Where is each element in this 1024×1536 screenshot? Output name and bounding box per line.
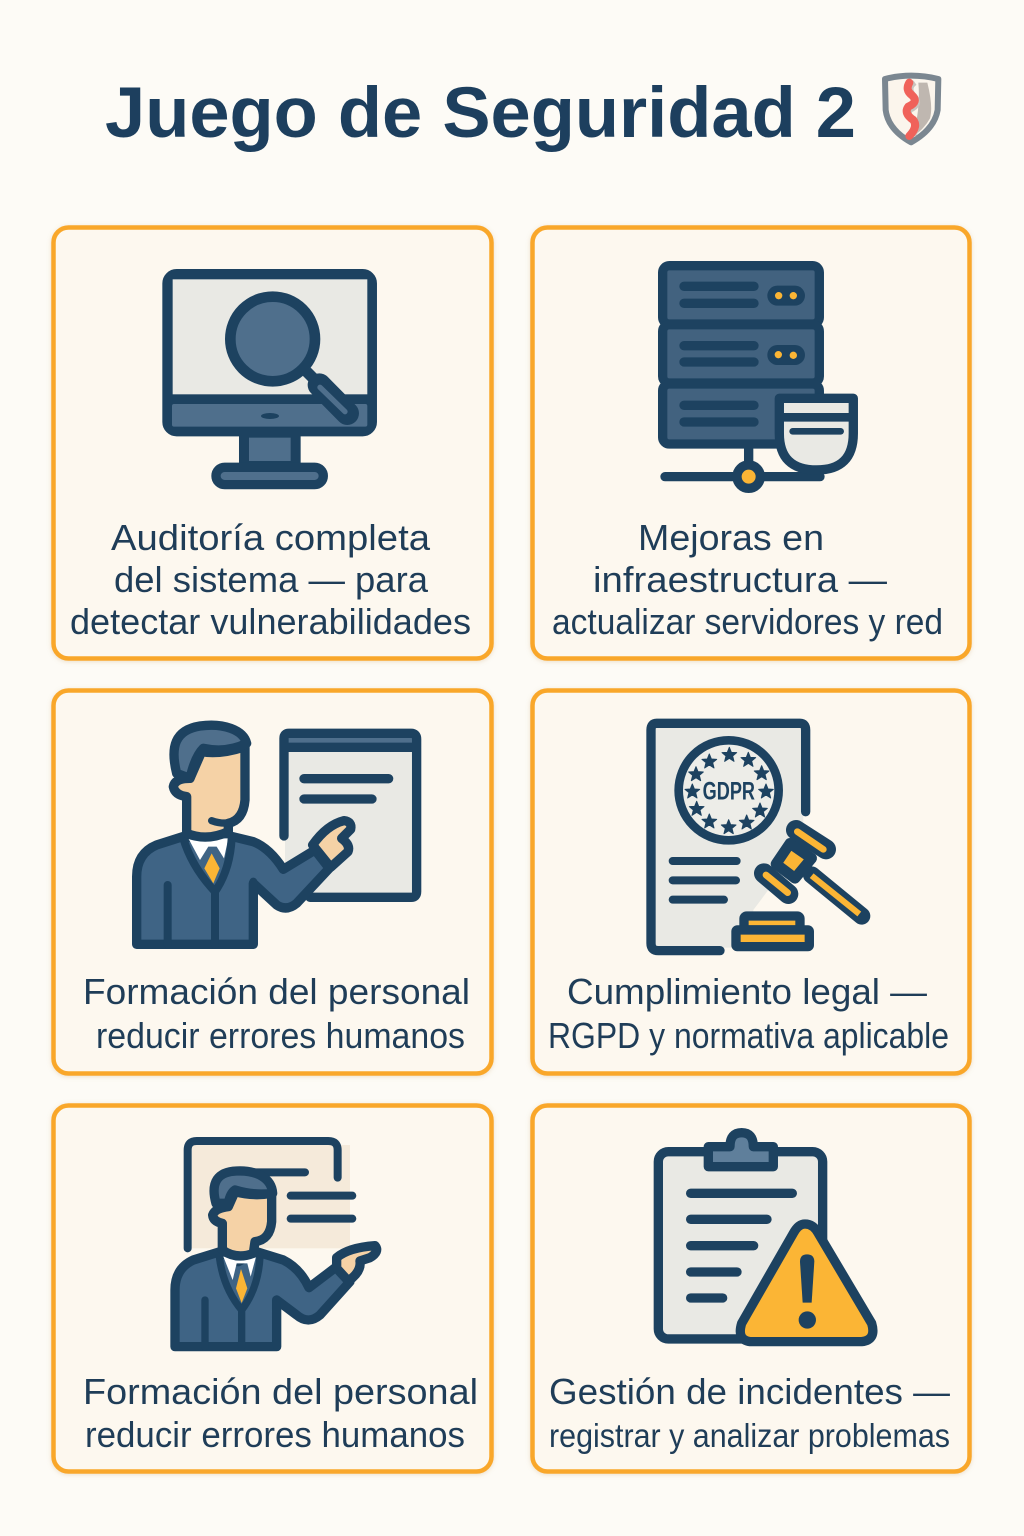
label: formación 1 [83,971,470,1056]
panel: formación 2 [54,1106,492,1472]
panel: gestión de incidentes [532,1106,970,1472]
label: formación 1: Formación del personal [83,971,470,1012]
icon: monitor with magnifier [167,274,372,485]
label: formación 2: Formación del personal [83,1371,478,1412]
label: auditoría: detectar vulnerabilidades [70,601,471,642]
label: infraestructura [552,517,943,642]
icon: presenter pointing [175,1141,377,1347]
label: cumplimiento legal: Cumplimiento legal — [567,971,927,1012]
label: gestión de incidentes: Gestión de incidentes — [549,1371,950,1412]
label: formación 2 [83,1371,478,1455]
icon: servers with shield [663,266,853,488]
panel: auditoría [54,228,492,658]
label: infraestructura: Mejoras en [638,517,824,558]
panel: cumplimiento legal [532,690,970,1074]
icon: shield [885,76,938,142]
icon: GDPR document with gavel [651,723,862,951]
icon: presenter at board [137,725,417,944]
label: formación 2: reducir errores humanos [85,1414,465,1455]
label: auditoría [70,517,471,642]
label: infraestructura: infraestructura — [593,559,887,600]
label: auditoría: Auditoría completa [111,517,431,558]
title: Juego de Seguridad 2 [105,74,856,153]
label: cumplimiento legal: RGPD y normativa aplicable [548,1015,949,1056]
icon: clipboard with warning [658,1133,873,1342]
label: gestión de incidentes [549,1371,950,1454]
panel: formación 1 [54,690,492,1074]
label: infraestructura: actualizar servidores y red [552,601,943,642]
panel: infraestructura [532,228,970,658]
icon: GDPR document with gavel: GDPR [703,778,755,805]
label: gestión de incidentes: registrar y analizar problemas [549,1417,950,1454]
label: formación 1: reducir errores humanos [96,1015,465,1056]
label: auditoría: del sistema — para [114,559,429,600]
label: cumplimiento legal [548,971,949,1056]
